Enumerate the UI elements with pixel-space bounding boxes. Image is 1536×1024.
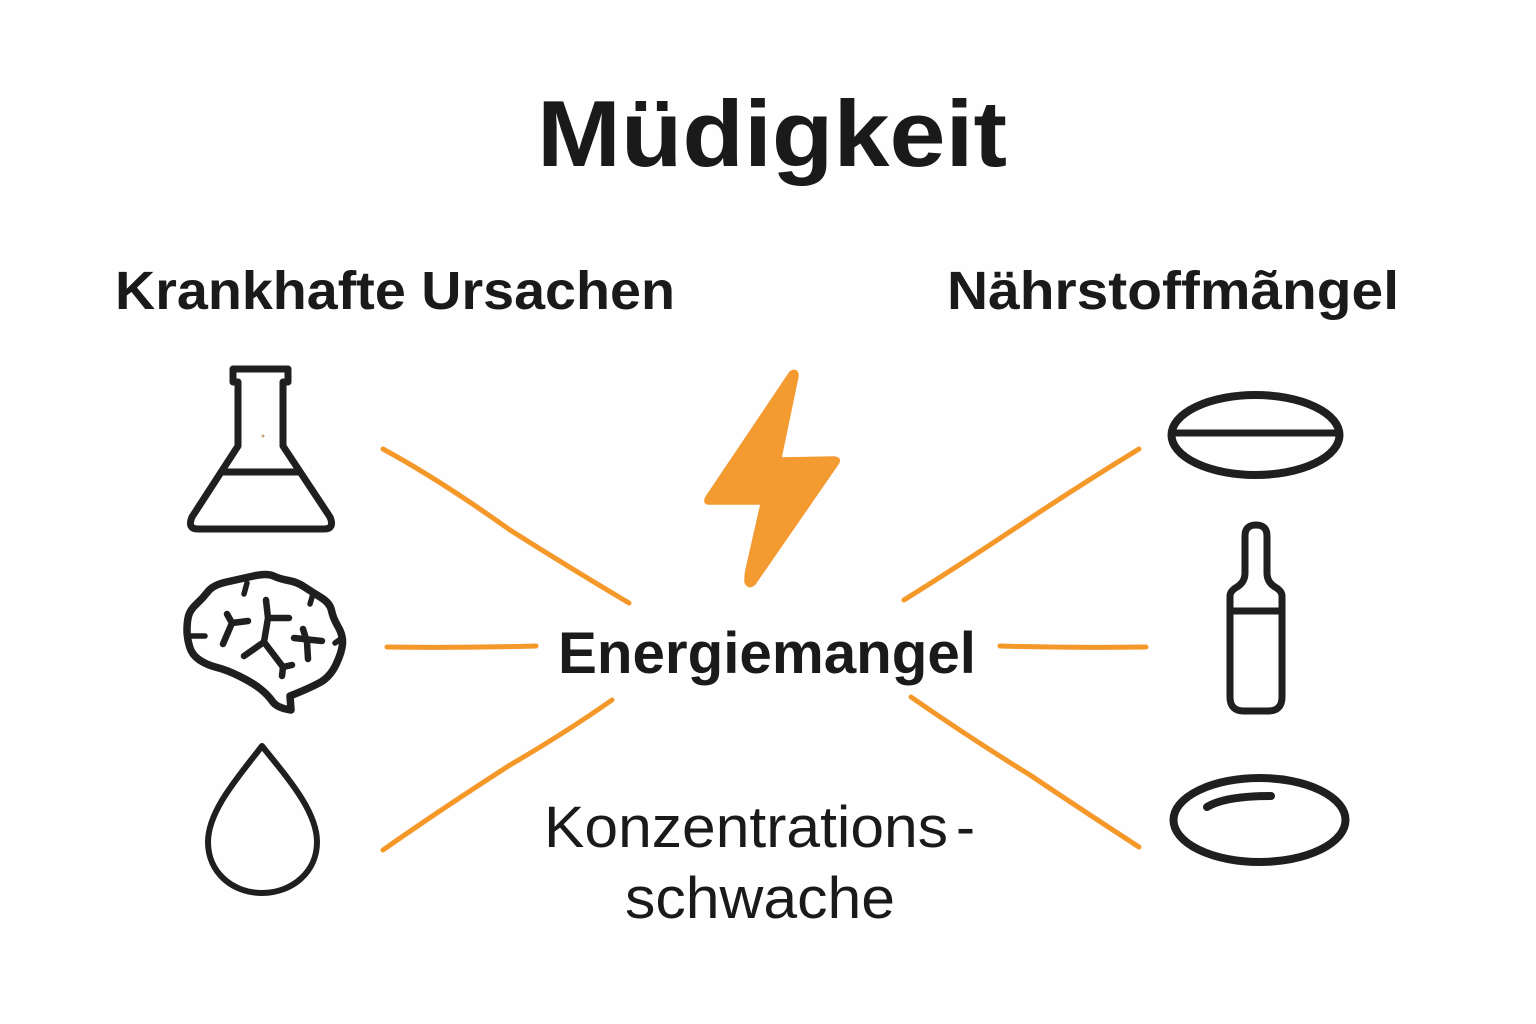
icon: flask (190, 369, 332, 529)
arrow: center to capsule (911, 697, 1139, 847)
label: Energiemangel: Energiemangel (558, 621, 976, 686)
arrow: center to tablet (904, 449, 1139, 600)
title: Müdigkeit (537, 81, 1007, 186)
arrow: brain to center (387, 646, 536, 647)
icon: brain (187, 574, 343, 710)
label: Konzentrationsschwäche: Konzentrations (544, 795, 948, 860)
icon: capsule (1174, 778, 1346, 862)
arrow: drop to center (383, 700, 612, 850)
icon: tablet (1172, 395, 1340, 475)
label: Konzentrationsschwäche: - (956, 795, 975, 860)
label: Konzentrationsschwäche (544, 795, 975, 931)
arrow: center to ampoule (1000, 646, 1146, 647)
icon: ampoule (1230, 525, 1282, 711)
icon: water drop (208, 746, 317, 893)
arrow: flask to center (383, 449, 629, 603)
icon: lightning bolt (705, 370, 839, 587)
label: Konzentrationsschwäche: schwache (625, 866, 895, 931)
heading: Krankhafte Ursachen: Krankhafte Ursachen (115, 261, 675, 321)
heading: Nährstoffmängel: Nährstoffmãngel (947, 261, 1399, 321)
